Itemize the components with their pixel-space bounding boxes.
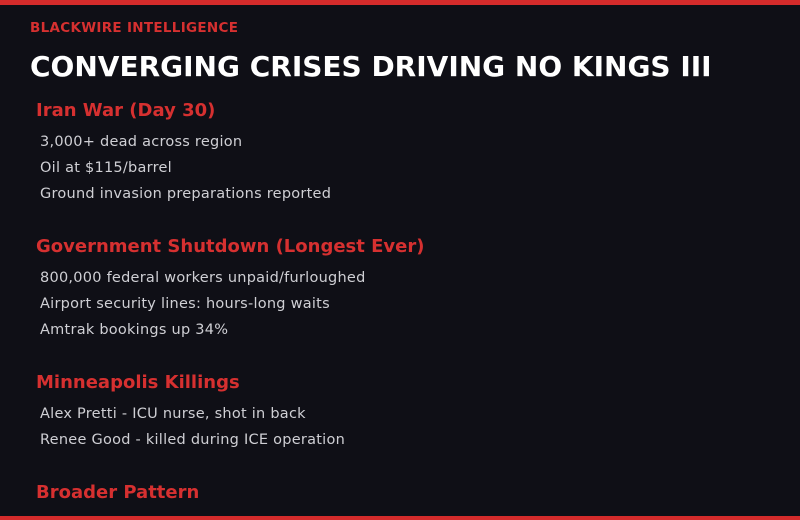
list: Shutdown items: Amtrak bookings up 34% bbox=[40, 322, 228, 338]
list: Iran War items bbox=[40, 134, 331, 202]
heading: Broader Pattern: Broader Pattern bbox=[36, 482, 199, 503]
list: Iran War items: Ground invasion preparations reported bbox=[40, 186, 331, 202]
heading: Minneapolis Killings: Minneapolis Killings bbox=[36, 372, 240, 393]
list: Shutdown items: Airport security lines: hours-long waits bbox=[40, 296, 330, 312]
list: Shutdown items: 800,000 federal workers unpaid/furloughed bbox=[40, 270, 366, 286]
section: Government Shutdown bbox=[36, 236, 424, 338]
list: Shutdown items bbox=[40, 270, 366, 338]
brand label: BLACKWIRE INTELLIGENCE bbox=[30, 20, 238, 36]
list: Iran War items: Oil at $115/barrel bbox=[40, 160, 172, 176]
heading: Iran War: Iran War (Day 30) bbox=[36, 100, 215, 121]
list: Iran War items: 3,000+ dead across region bbox=[40, 134, 242, 150]
title: CONVERGING CRISES DRIVING NO KINGS III bbox=[30, 50, 712, 83]
list: Minneapolis items bbox=[40, 406, 345, 448]
list: Minneapolis items: Alex Pretti - ICU nurse, shot in back bbox=[40, 406, 306, 422]
list: Minneapolis items: Renee Good - killed during ICE operation bbox=[40, 432, 345, 448]
section: Iran War bbox=[36, 100, 331, 202]
section: Minneapolis Killings bbox=[36, 372, 345, 448]
heading: Government Shutdown: Government Shutdown (Longest Ever) bbox=[36, 236, 424, 257]
